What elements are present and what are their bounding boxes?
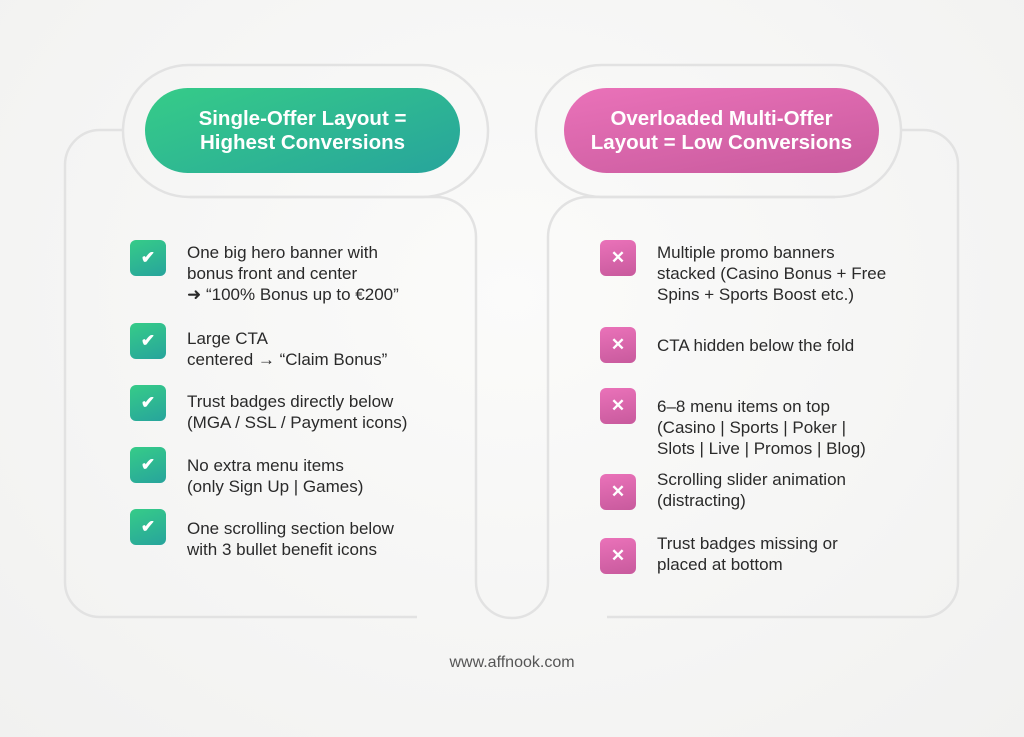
text 3 <box>657 397 866 458</box>
text 4: (distracting) <box>657 491 746 510</box>
icon: check 1: ✔ <box>141 248 155 267</box>
text 5 <box>187 519 394 559</box>
heading: single-offer: Highest Conversions <box>200 130 405 154</box>
text 1: Spins + Sports Boost etc.) <box>657 285 854 304</box>
icon: x 5: ✕ <box>611 546 625 565</box>
text 5: with 3 bullet benefit icons <box>187 540 377 559</box>
text 1: Multiple promo banners <box>657 243 835 262</box>
heading: overloaded: Layout = Low Conversions <box>591 130 852 154</box>
icon: x 4: ✕ <box>611 482 625 501</box>
text 4 <box>187 456 363 496</box>
text 3: (MGA / SSL / Payment icons) <box>187 413 407 432</box>
text 3: 6–8 menu items on top <box>657 397 830 416</box>
text 2: CTA hidden below the fold <box>657 336 854 355</box>
heading: overloaded: Overloaded Multi-Offer <box>610 106 833 130</box>
text 1: bonus front and center <box>187 264 357 283</box>
heading: overloaded <box>564 88 879 173</box>
icon: x 2 <box>600 327 636 363</box>
text 5: One scrolling section below <box>187 519 394 538</box>
icon: x 3: ✕ <box>611 396 625 415</box>
text 1 <box>187 243 399 304</box>
heading: single-offer <box>145 88 460 173</box>
icon: check 2: ✔ <box>141 331 155 350</box>
text 5: placed at bottom <box>657 555 783 574</box>
icon: check 5: ✔ <box>141 517 155 536</box>
text 5 <box>657 534 838 574</box>
text 1: ➜ “100% Bonus up to €200” <box>187 285 399 304</box>
text 3: (Casino | Sports | Poker | <box>657 418 846 437</box>
icon: x 2: ✕ <box>611 335 625 354</box>
icon: check 3: ✔ <box>141 393 155 412</box>
icon: check 5 <box>130 509 166 545</box>
icon: check 1 <box>130 240 166 276</box>
text 4: (only Sign Up | Games) <box>187 477 363 496</box>
text 1: stacked (Casino Bonus + Free <box>657 264 886 283</box>
text 1: One big hero banner with <box>187 243 378 262</box>
heading: single-offer: Single-Offer Layout = <box>199 106 406 130</box>
text 4: Scrolling slider animation <box>657 470 846 489</box>
panel: right list <box>600 240 886 574</box>
text 2: centered → “Claim Bonus” <box>187 350 387 369</box>
text 5: Trust badges missing or <box>657 534 838 553</box>
icon: check 4 <box>130 447 166 483</box>
panel: left list <box>130 240 407 559</box>
icon: x 1: ✕ <box>611 248 625 267</box>
icon: check 3 <box>130 385 166 421</box>
icon: x 5 <box>600 538 636 574</box>
text 3 <box>187 392 407 432</box>
text 2: Large CTA <box>187 329 268 348</box>
icon: check 4: ✔ <box>141 455 155 474</box>
footer url: www.affnook.com <box>449 654 575 671</box>
text 4: No extra menu items <box>187 456 344 475</box>
text 3: Slots | Live | Promos | Blog) <box>657 439 866 458</box>
icon: x 4 <box>600 474 636 510</box>
text 1 <box>657 243 886 304</box>
text 2 <box>187 329 387 369</box>
icon: check 2 <box>130 323 166 359</box>
text 4 <box>657 470 846 510</box>
text 3: Trust badges directly below <box>187 392 393 411</box>
icon: x 3 <box>600 388 636 424</box>
icon: x 1 <box>600 240 636 276</box>
